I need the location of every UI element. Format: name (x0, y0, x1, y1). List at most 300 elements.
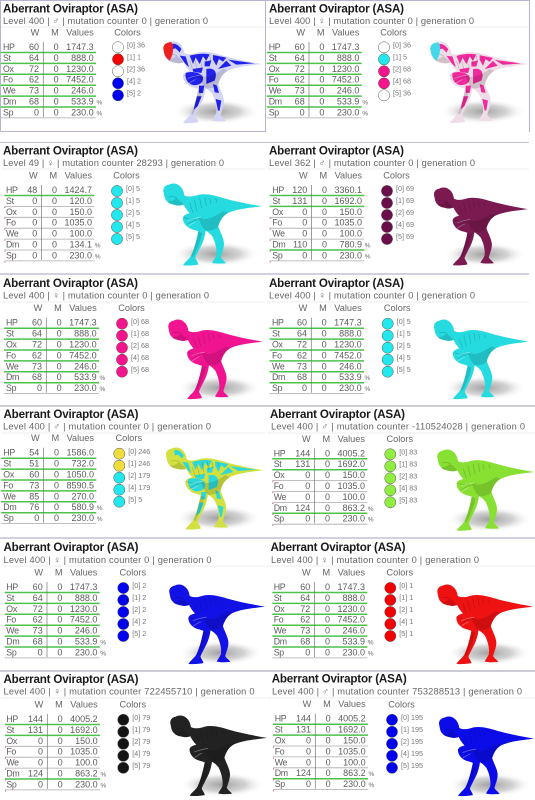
stats table: Values (334, 303, 362, 313)
level line: Level 49 | ♀ | mutation counter 28293 | generation 0 (3, 158, 224, 168)
color swatches: Colors (113, 170, 140, 180)
stats table: Dm (274, 636, 287, 646)
stats table: 0 (325, 492, 330, 502)
level line: Level 400 | ♀ | mutation counter 0 | generation 0 (4, 555, 212, 565)
stats table: 100.0 (343, 757, 366, 767)
stats table: 100.0 (342, 492, 365, 502)
stats table: 120.0 (69, 196, 92, 206)
stats table: % (368, 771, 374, 778)
color swatches: [5] 79 (132, 761, 150, 770)
stats table: 85 (29, 491, 39, 501)
stats table: 0 (54, 53, 59, 63)
stats table: Fo (274, 615, 284, 625)
color swatches (381, 170, 414, 245)
stats table: 8590.5 (66, 480, 94, 490)
stats table: Sp (272, 250, 283, 260)
stats table: 0 (57, 350, 62, 360)
stats table: 0 (58, 725, 63, 735)
stats table: % (362, 110, 368, 117)
dinosaur: maroon (434, 188, 528, 266)
stats table: M (55, 700, 63, 710)
color swatches: [2] 179 (128, 471, 150, 480)
stats table: 230.0 (69, 250, 92, 260)
dinosaur: white blue red (163, 41, 262, 124)
stats table: St (272, 196, 281, 206)
stats table: 246.0 (75, 626, 97, 636)
stats table: 1230.0 (334, 340, 362, 350)
stats table: 780.9 (339, 240, 362, 250)
stats table: 0 (325, 459, 330, 469)
stats table: 0 (54, 459, 59, 469)
stats table: 0 (52, 218, 57, 228)
stats table: % (100, 650, 106, 657)
stats table: 68 (29, 96, 39, 106)
stats table: We (275, 757, 288, 767)
dinosaur: lime (437, 449, 534, 532)
stats table: Values (65, 170, 92, 180)
stats table: 1747.3 (69, 318, 97, 328)
stats table: Ox (275, 736, 286, 746)
stats table: % (100, 782, 106, 789)
stats table: 533.9 (71, 96, 94, 106)
stats table: 1230.0 (337, 604, 365, 614)
level line: Level 400 | ♂ | mutation counter 753288513 | generation 0 (272, 687, 522, 697)
stats table: 0 (54, 448, 59, 458)
stats table: Ox (3, 470, 15, 480)
stats table (4, 170, 101, 262)
stats table: 4005.2 (338, 714, 366, 724)
stats table: 48 (27, 185, 37, 195)
stats table: 110 (293, 240, 307, 250)
stats table: St (3, 53, 12, 63)
color swatches: [4] 69 (396, 220, 414, 229)
stats table: 0 (325, 470, 330, 480)
title: Aberrant Oviraptor (ASA) (272, 672, 407, 686)
stats table: % (100, 375, 106, 382)
color swatches: [0] 36 (393, 40, 411, 50)
stats table: 0 (52, 196, 57, 206)
title: Aberrant Oviraptor (ASA) (269, 2, 404, 16)
stats table: 0 (305, 514, 310, 524)
stats table: M (319, 170, 327, 180)
color swatches: [5] 68 (131, 365, 149, 374)
stats table: 230.0 (71, 513, 94, 523)
title: Aberrant Oviraptor (ASA) (270, 541, 406, 554)
stats table: % (368, 506, 374, 513)
panel: aberrant oviraptor 3 (1, 144, 265, 267)
color swatches: [5] 5 (397, 365, 411, 374)
stats table: W (302, 434, 311, 444)
stats table: M (322, 434, 330, 444)
stats table: Ox (3, 64, 15, 74)
stats table: 0 (325, 647, 330, 657)
stats table: 0 (34, 107, 39, 117)
stats table: 230.0 (343, 779, 366, 789)
stats table: 0 (54, 64, 59, 74)
stats table: 1035.0 (70, 747, 98, 757)
color swatches: [5] 83 (399, 496, 417, 504)
stats table: 533.9 (339, 372, 362, 382)
stats table: Ox (274, 604, 285, 614)
stats table (5, 568, 106, 658)
stats table: We (6, 758, 19, 768)
stats table: 60 (297, 318, 307, 328)
stats table: 0 (306, 757, 311, 767)
stats table: 0 (54, 42, 59, 52)
color swatches (378, 28, 411, 101)
panel: aberrant oviraptor 10 (267, 541, 535, 665)
stats table: 0 (322, 196, 327, 206)
stats table: M (55, 568, 63, 578)
stats table: 0 (319, 75, 324, 85)
stats table: Sp (275, 779, 285, 789)
stats table: 7452.0 (70, 615, 97, 625)
color swatches (385, 434, 417, 508)
stats table: 0 (57, 329, 62, 339)
color swatches (118, 568, 146, 642)
stats table: W (29, 170, 38, 180)
stats table: 100.0 (69, 229, 92, 239)
stats table: 134.1 (69, 240, 92, 250)
stats table: Dm (3, 502, 16, 512)
stats table: 0 (57, 647, 62, 657)
stats table: 230.0 (342, 514, 365, 524)
stats table: 0 (322, 185, 327, 195)
stats table: 230.0 (337, 107, 359, 117)
stats table: Ox (6, 207, 18, 217)
divider: row 3 (0, 273, 529, 275)
stats table: 1692.0 (334, 196, 362, 206)
stats table: Sp (3, 107, 14, 117)
color swatches: [2] 5 (126, 208, 140, 217)
stats table: We (3, 86, 16, 96)
stats table: 0 (322, 372, 327, 382)
panel: aberrant oviraptor 9 (1, 541, 265, 665)
stats table: % (95, 253, 101, 260)
stats table: 0 (322, 229, 327, 239)
stats table: 73 (300, 626, 310, 636)
stats table: 144 (28, 714, 43, 724)
stats table: Fo (274, 481, 284, 491)
stats table: 0 (57, 372, 62, 382)
stats table: M (49, 170, 57, 180)
stats table: 60 (295, 42, 305, 52)
stats table: 0 (57, 383, 62, 393)
stats table: % (96, 100, 102, 106)
stats table: Sp (269, 107, 279, 117)
stats table: M (54, 303, 62, 313)
stats table: Values (338, 568, 365, 578)
stats table: HP (6, 185, 18, 195)
stats table: 0 (52, 240, 57, 250)
stats table: 0 (58, 736, 63, 746)
stats table: 0 (54, 107, 59, 117)
stats table: Dm (272, 372, 285, 382)
stats table: 0 (322, 361, 327, 371)
stats table: 131 (295, 459, 310, 469)
panel: aberrant oviraptor 7 (1, 408, 265, 531)
stats table: 0 (54, 86, 59, 96)
stats table: Fo (3, 75, 13, 85)
stats table: 64 (297, 329, 307, 339)
color swatches: [2] 68 (131, 341, 149, 350)
color swatches (116, 303, 149, 377)
color swatches: [4] 68 (131, 353, 149, 362)
stats table: 0 (58, 747, 63, 757)
stats table: 1035.0 (337, 481, 365, 491)
title: Aberrant Oviraptor (ASA) (4, 408, 139, 421)
stats table: 533.9 (342, 636, 365, 646)
color swatches: Colors (120, 699, 146, 709)
stats table: St (6, 593, 15, 603)
color swatches: [1] 68 (131, 329, 149, 338)
stats table: Ox (272, 340, 284, 350)
stats table: 1424.7 (64, 185, 92, 195)
stats table: 76 (29, 502, 39, 512)
stats table: 580.9 (71, 502, 94, 512)
stats table: W (34, 568, 43, 578)
divider: row 2 (0, 142, 529, 144)
stats table: 62 (297, 350, 307, 360)
stats table: % (97, 505, 103, 512)
dinosaur: blue (169, 585, 265, 665)
stats table: 0 (319, 53, 324, 63)
stats table: 150.0 (75, 736, 98, 746)
stats table: 1035.0 (334, 218, 362, 228)
stats table: Fo (275, 746, 285, 756)
stats table: 0 (32, 207, 37, 217)
color swatches: Colors (120, 568, 146, 578)
stats table: HP (274, 448, 286, 458)
stats table: 124 (296, 768, 311, 778)
level line: Level 362 | ♂ | mutation counter 0 | generation 0 (269, 158, 475, 168)
stats table: 0 (319, 107, 324, 117)
color swatches: [1] 5 (393, 52, 407, 62)
stats table: 0 (52, 207, 57, 217)
dinosaur: deep blue (439, 717, 534, 797)
stats table: 0 (326, 746, 331, 756)
stats table: 7452.0 (334, 350, 362, 360)
stats table: Ox (269, 64, 280, 74)
color swatches: Colors (388, 699, 415, 709)
stats table: 0 (38, 779, 43, 789)
stats table: 0 (325, 593, 330, 603)
color swatches: [4] 5 (126, 220, 140, 229)
stats table: 0 (325, 503, 330, 513)
stats table: 0 (58, 768, 63, 778)
stats table: 0 (54, 502, 59, 512)
stats table: 0 (57, 582, 62, 592)
stats table: HP (272, 318, 284, 328)
color swatches (385, 568, 413, 642)
stats table: 230.0 (71, 107, 94, 117)
stats table: Ox (6, 604, 18, 614)
stats table: 54 (29, 448, 39, 458)
stats table: 246.0 (71, 86, 94, 96)
stats table: We (3, 491, 16, 501)
color swatches: Colors (116, 433, 142, 443)
stats table: Fo (6, 350, 16, 360)
stats table: 0 (326, 725, 331, 735)
stats table: % (364, 375, 370, 382)
stats table: 246.0 (74, 361, 97, 371)
color swatches: [4] 2 (127, 76, 141, 86)
stats table: M (323, 699, 331, 709)
color swatches: [5] 5 (126, 232, 140, 241)
stats table: St (275, 725, 283, 735)
stats table: St (269, 53, 277, 63)
stats table: Dm (274, 503, 287, 513)
stats table: 0 (322, 218, 327, 228)
stats table: 124 (295, 503, 310, 513)
color swatches: [0] 68 (131, 317, 149, 326)
stats table: HP (3, 42, 15, 52)
stats table: 0 (322, 350, 327, 360)
stats table: 0 (302, 229, 307, 239)
stats table: 1230.0 (70, 604, 97, 614)
panel: aberrant oviraptor 12 (267, 672, 535, 797)
stats table: Values (70, 700, 98, 710)
stats table: 72 (297, 340, 307, 350)
stats table: Values (338, 434, 365, 444)
stats table: 0 (38, 736, 43, 746)
stats table: 68 (33, 636, 43, 646)
color swatches: [4] 83 (399, 484, 417, 492)
stats table: W (31, 433, 40, 443)
stats table: 0 (54, 480, 59, 490)
stats table: W (296, 28, 305, 38)
color swatches: [1] 195 (401, 725, 423, 734)
stats table: 0 (305, 647, 310, 657)
stats table: M (319, 303, 327, 313)
stats table: 888.0 (75, 593, 97, 603)
stats table: 0 (37, 383, 42, 393)
stats table: 73 (295, 86, 305, 96)
color swatches (112, 28, 145, 101)
stats table: 0 (32, 250, 37, 260)
color swatches: [5] 2 (127, 88, 141, 98)
stats table: Fo (6, 615, 16, 625)
stats table: We (6, 626, 19, 636)
color swatches: [4] 195 (401, 749, 423, 758)
stats table: 1230.0 (66, 64, 94, 74)
frame: top row panels (0, 0, 530, 132)
level line: Level 400 | ♀ | mutation counter 722455710 | generation 0 (4, 686, 254, 696)
stats table: 1035.0 (338, 746, 366, 756)
color swatches: [0] 69 (396, 184, 414, 193)
stats table: 888.0 (71, 53, 94, 63)
stats table: W (299, 170, 308, 180)
stats table: % (368, 782, 374, 789)
stats table: 0 (32, 229, 37, 239)
stats table (5, 700, 106, 791)
stats table: 100.0 (339, 229, 362, 239)
stats table: 0 (54, 470, 59, 480)
stats table: 62 (29, 75, 39, 85)
stats table: W (31, 28, 40, 38)
stats table: 230.0 (75, 779, 98, 789)
divider: row 4 (0, 405, 535, 407)
stats table: Values (69, 303, 97, 313)
stats table: 7452.0 (337, 615, 365, 625)
stats table: 0 (322, 250, 327, 260)
stats table: 0 (325, 481, 330, 491)
stats table: 732.0 (71, 459, 94, 469)
stats table: 0 (57, 636, 62, 646)
stats table: % (362, 100, 368, 106)
stats table: 1230.0 (332, 64, 359, 74)
title: Aberrant Oviraptor (ASA) (4, 541, 139, 554)
stats table: 0 (57, 615, 62, 625)
stats table: % (364, 386, 370, 393)
stats table: W (302, 568, 311, 578)
color swatches: [5] 69 (396, 232, 414, 241)
stats table: 68 (300, 636, 310, 646)
color swatches: [4] 179 (128, 483, 150, 492)
stats table: 64 (33, 593, 43, 603)
stats table: We (274, 492, 287, 502)
color swatches: [1] 1 (127, 52, 141, 62)
panel: aberrant oviraptor 8 (267, 408, 535, 532)
color swatches: [0] 36 (127, 40, 145, 50)
stats table: 1747.3 (70, 582, 97, 592)
panel: aberrant oviraptor 1 (1, 2, 265, 124)
stats table: M (317, 28, 325, 38)
stats table: 0 (319, 96, 324, 106)
stats table: 60 (32, 318, 42, 328)
stats table: 0 (326, 757, 331, 767)
stats table (270, 303, 370, 394)
stats table: 0 (58, 714, 63, 724)
color swatches: [2] 36 (127, 64, 145, 74)
stats table: We (269, 86, 282, 96)
divider: row 6 (0, 670, 535, 672)
stats table: 72 (33, 604, 43, 614)
stats table: 0 (319, 86, 324, 96)
dinosaur: cyan (434, 320, 528, 400)
stats table: 0 (325, 626, 330, 636)
stats table: 62 (32, 350, 42, 360)
stats table: St (6, 725, 15, 735)
stats table: W (34, 303, 43, 313)
stats table: 888.0 (74, 329, 97, 339)
title: Aberrant Oviraptor (ASA) (269, 277, 404, 290)
stats table: 0 (325, 615, 330, 625)
stats table: 1692.0 (70, 725, 98, 735)
stats table: 73 (32, 361, 42, 371)
color swatches: [0] 79 (132, 713, 150, 722)
stats table: HP (3, 448, 15, 458)
stats table: M (51, 433, 59, 443)
color swatches: [4] 1 (399, 617, 413, 626)
stats table: HP (6, 714, 18, 724)
stats table: 62 (300, 615, 310, 625)
stats table: 0 (302, 207, 307, 217)
stats table: 0 (325, 582, 330, 592)
panel: aberrant oviraptor 2 (267, 2, 529, 124)
stats table: Values (335, 170, 362, 180)
stats table: 131 (296, 725, 311, 735)
stats table: 0 (52, 229, 57, 239)
title: Aberrant Oviraptor (ASA) (3, 2, 138, 16)
stats table: 68 (32, 372, 42, 382)
color swatches (386, 699, 423, 773)
stats table: 0 (322, 340, 327, 350)
stats table: 72 (32, 340, 42, 350)
stats table: HP (269, 42, 281, 52)
stats table: Fo (3, 480, 13, 490)
stats table: 0 (57, 604, 62, 614)
